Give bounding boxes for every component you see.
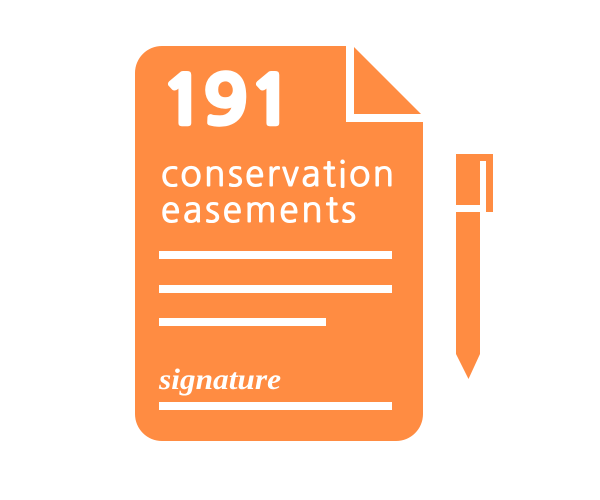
- label: conservation easements: conservation: [161, 157, 394, 192]
- panel: document: [135, 46, 423, 441]
- big number: 191: [161, 69, 293, 134]
- pen body and tip: [456, 212, 480, 379]
- signature line: [159, 402, 392, 410]
- document page body: [135, 46, 423, 441]
- pen cap and clip: [456, 154, 493, 212]
- label: conservation easements: easements: [161, 193, 356, 228]
- icon: pen: [456, 154, 493, 379]
- document folded corner: [354, 47, 421, 114]
- signature label: signature: [158, 363, 281, 396]
- text lines: [159, 251, 392, 326]
- label: conservation easements: [161, 157, 394, 228]
